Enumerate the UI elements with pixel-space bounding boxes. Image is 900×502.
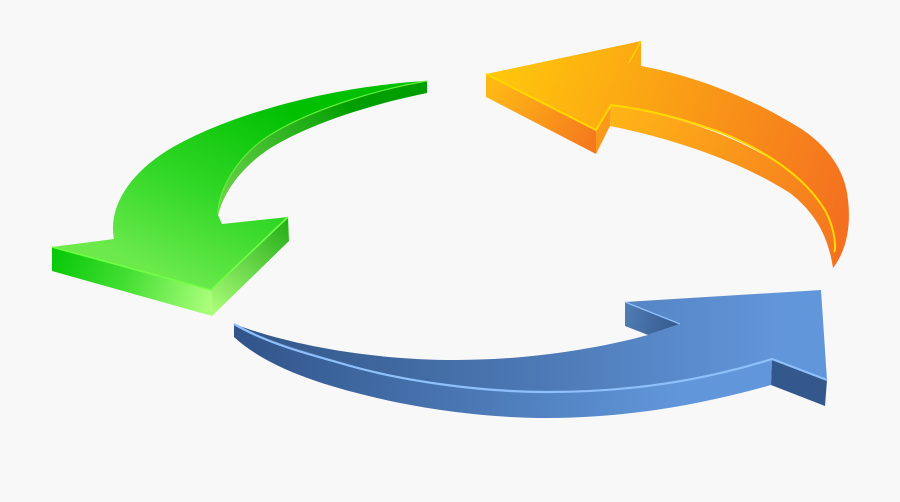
green arrow — [52, 81, 427, 316]
green top face — [52, 81, 427, 290]
blue top face — [234, 290, 827, 392]
blue arrow — [234, 290, 827, 418]
orange arrow — [486, 41, 849, 268]
orange highlights — [486, 74, 835, 252]
green inner curved side — [218, 81, 427, 215]
orange inner curved side — [610, 105, 838, 268]
blue highlights — [234, 324, 827, 392]
green highlights — [52, 217, 288, 290]
blue notch side — [625, 302, 680, 335]
orange head side — [486, 74, 611, 154]
blue head side — [771, 359, 827, 406]
orange top face — [486, 41, 849, 268]
blue lower curved side — [234, 324, 772, 418]
green head right side — [211, 217, 289, 316]
green head front side — [52, 247, 212, 316]
